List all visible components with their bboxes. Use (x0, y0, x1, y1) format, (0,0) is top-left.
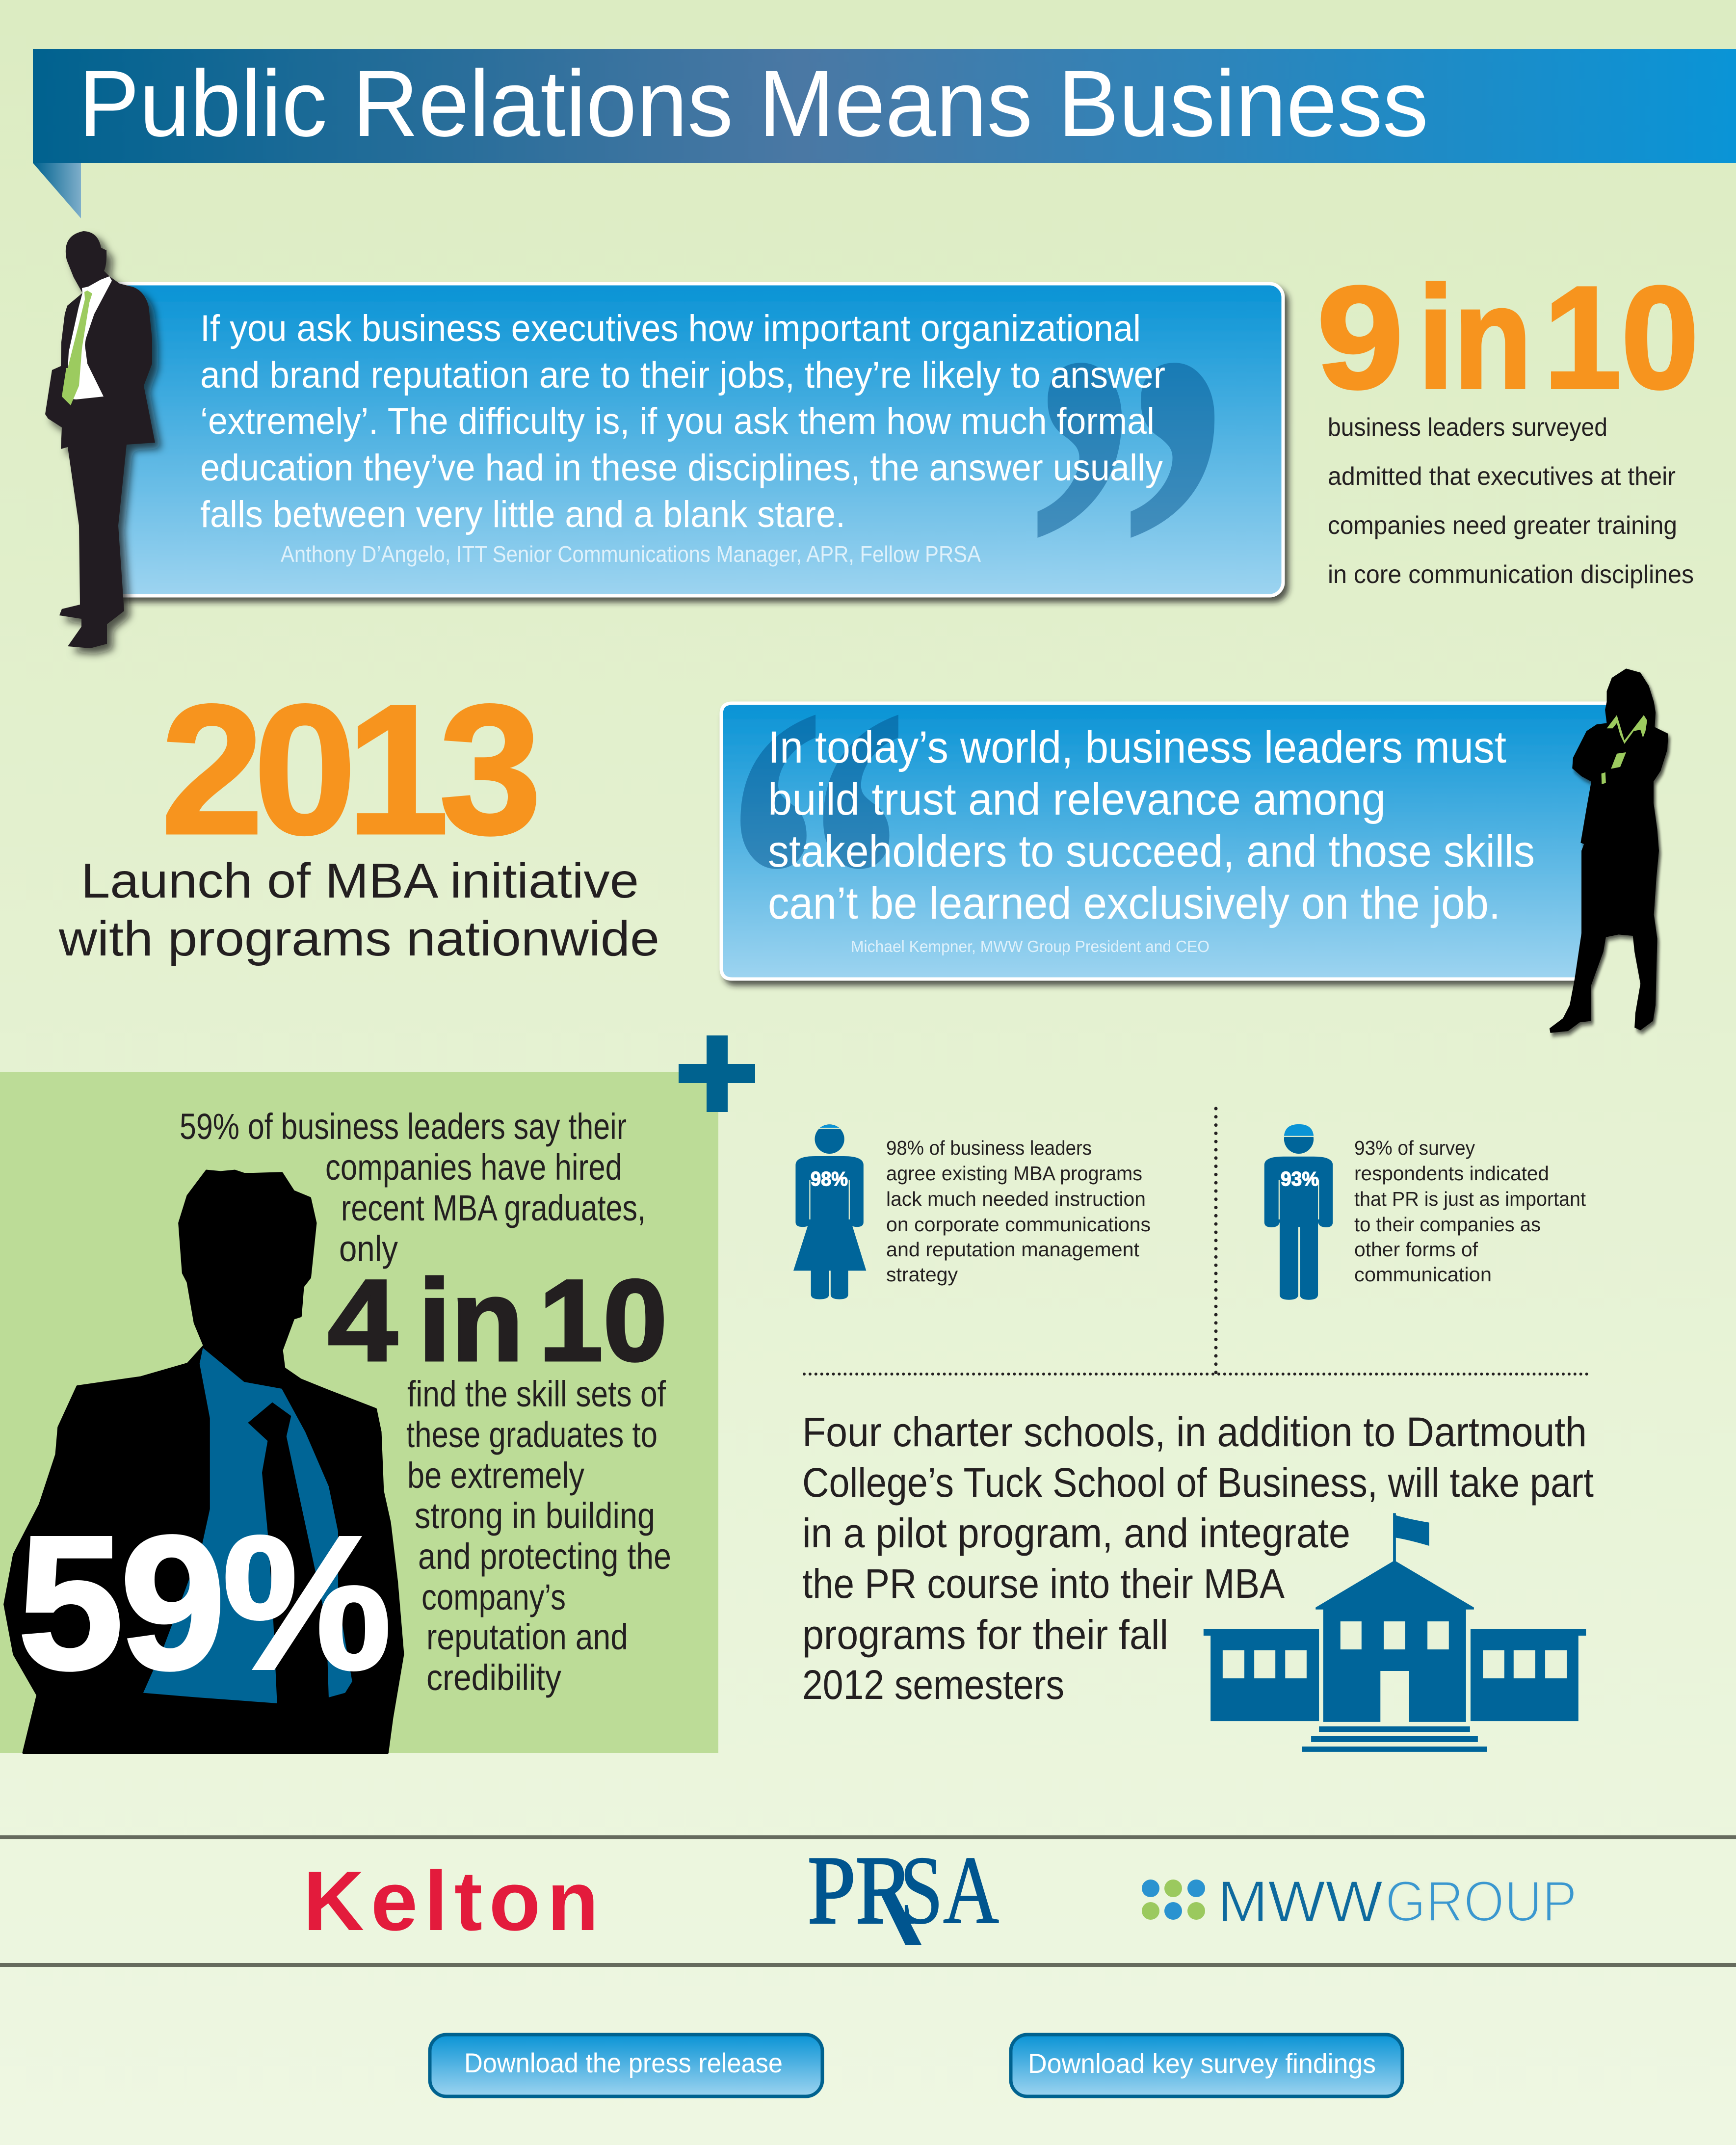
year description: with programs nationwide (58, 911, 659, 966)
panel: 59 percent (0, 1072, 718, 1753)
logo wordmark: GROUP (1385, 1869, 1577, 1934)
quote text: can’t be learned exclusively on the job. (768, 878, 1500, 928)
text: skill sets: these graduates to (406, 1414, 658, 1455)
stat description: and reputation management (886, 1238, 1140, 1261)
banner ribbon (33, 49, 1736, 163)
text block: charter schools: Four charter schools, in addition to Dartmouth (802, 1409, 1587, 1455)
stat description (1354, 1137, 1586, 1286)
button: press release: Download the press release (464, 2047, 783, 2078)
icon: businessman silhouette (45, 231, 155, 648)
text: skill sets: be extremely (407, 1455, 584, 1496)
year description: Launch of MBA initiative (81, 853, 639, 908)
button: survey findings: Download key survey findings (1028, 2048, 1376, 2079)
icon: woman figure (793, 1124, 866, 1299)
text: skill sets: find the skill sets of (407, 1374, 666, 1414)
stat description: respondents indicated (1354, 1162, 1549, 1185)
big percent: 59% (18, 1497, 392, 1709)
stat: 93 percent (1264, 1124, 1586, 1300)
text: hired graduates: 59% of business leaders say their (180, 1106, 627, 1147)
quote attribution: Anthony D’Angelo, ITT Senior Communications Manager, APR, Fellow PRSA (281, 541, 981, 567)
banner tail (33, 163, 81, 218)
text block: charter schools: programs for their fall (802, 1612, 1168, 1658)
stat description (1328, 413, 1694, 589)
big number (1317, 256, 1699, 419)
icon: plus sign (679, 1035, 755, 1112)
icon: man figure (1264, 1124, 1333, 1300)
icon: closing quote mark: ” (1022, 232, 1234, 874)
icon: school building (1204, 1513, 1586, 1752)
logo: PRSA: PR (808, 1836, 913, 1944)
figure percent: 93% (1281, 1167, 1319, 1190)
icon: man silhouette (5, 1171, 403, 1753)
button: survey findings (1011, 2035, 1402, 2096)
big number: 9 (1317, 256, 1403, 419)
stat description: on corporate communications (886, 1213, 1151, 1236)
logo: PRSA: SA (900, 1836, 999, 1944)
stat description: communication (1354, 1263, 1492, 1286)
year: 2013 (161, 666, 542, 873)
logo: MWW Group (1142, 1869, 1577, 1934)
text: hired graduates: only (339, 1228, 398, 1269)
dotted dividers (804, 1109, 1588, 1374)
stat: 98 percent (793, 1124, 1151, 1299)
stat: 4 in 10: 4 (328, 1256, 397, 1385)
stat description (886, 1137, 1151, 1286)
stat: 4 in 10: in (418, 1256, 524, 1385)
text: hired graduates: companies have hired (325, 1147, 622, 1188)
text block: charter schools: in a pilot program, and integrate (802, 1510, 1350, 1556)
stat description: business leaders surveyed (1328, 413, 1607, 442)
quote attribution: Michael Kempner, MWW Group President and CEO (851, 937, 1210, 955)
quote text: and brand reputation are to their jobs, they’re likely to answer (200, 354, 1165, 396)
divider lines (0, 1835, 1736, 1967)
title: Public Relations Means Business (79, 51, 1428, 156)
text: skill sets (406, 1374, 671, 1698)
quote text: education they’ve had in these disciplines, the answer usually (200, 447, 1163, 489)
icon: businesswoman silhouette (1550, 668, 1668, 1033)
logo wordmark: MWW (1217, 1869, 1383, 1934)
text: skill sets: credibility (426, 1657, 561, 1698)
button: press release (430, 2035, 822, 2096)
text block: charter schools (802, 1409, 1594, 1708)
quote text: ‘extremely’. The difficulty is, if you ask them how much formal (200, 400, 1155, 442)
stat description: 93% of survey (1354, 1137, 1475, 1159)
icon: opening quote mark: “ (722, 599, 911, 1165)
stat description: companies need greater training (1328, 511, 1677, 540)
logo dots (1142, 1880, 1205, 1920)
panel: quote D'Angelo (83, 232, 1283, 874)
quote text (768, 722, 1535, 928)
year description (58, 853, 659, 966)
big number: in (1418, 256, 1532, 419)
stat description: in core communication disciplines (1328, 560, 1694, 589)
text: skill sets: strong in building (415, 1495, 655, 1536)
figure percent: 98% (811, 1167, 848, 1190)
quote text: If you ask business executives how important organizational (200, 308, 1141, 349)
stat: 9 in 10 (1317, 256, 1699, 589)
quote text: In today’s world, business leaders must (768, 722, 1506, 772)
stat description: strategy (886, 1263, 958, 1286)
text: hired graduates: recent MBA graduates, (341, 1188, 646, 1228)
logo: Kelton: Kelton (303, 1854, 599, 1948)
stat description: lack much needed instruction (886, 1188, 1146, 1210)
big number: 10 (1544, 256, 1699, 419)
stat description: that PR is just as important (1354, 1188, 1586, 1210)
quote text (200, 308, 1165, 535)
logo: PRSA (808, 1836, 999, 1945)
quote text: build trust and relevance among (768, 774, 1386, 824)
stat description: other forms of (1354, 1238, 1478, 1261)
stat: 4 in 10: 10 (539, 1256, 667, 1385)
stat: 4 in 10 (328, 1256, 667, 1385)
text block: charter schools: College’s Tuck School of Business, will take part (802, 1459, 1594, 1506)
stat description: admitted that executives at their (1328, 462, 1676, 491)
quote text: stakeholders to succeed, and those skills (768, 826, 1535, 876)
stat description: agree existing MBA programs (886, 1162, 1142, 1185)
stat description: to their companies as (1354, 1213, 1541, 1236)
stat: 2013 (58, 666, 659, 966)
text: skill sets: company’s (421, 1577, 566, 1617)
green panel background (0, 1072, 718, 1753)
quote box (721, 703, 1610, 979)
stat description: 98% of business leaders (886, 1137, 1092, 1159)
text block: charter schools: the PR course into their MBA (802, 1561, 1285, 1607)
panel: quote Kempner (721, 599, 1610, 1165)
text: hired graduates (180, 1106, 646, 1269)
quote box (83, 284, 1283, 596)
text block: charter schools: 2012 semesters (802, 1662, 1064, 1708)
title banner (33, 49, 1736, 218)
text: skill sets: reputation and (426, 1616, 628, 1657)
quote text: falls between very little and a blank stare. (200, 494, 845, 535)
text: skill sets: and protecting the (418, 1536, 671, 1577)
